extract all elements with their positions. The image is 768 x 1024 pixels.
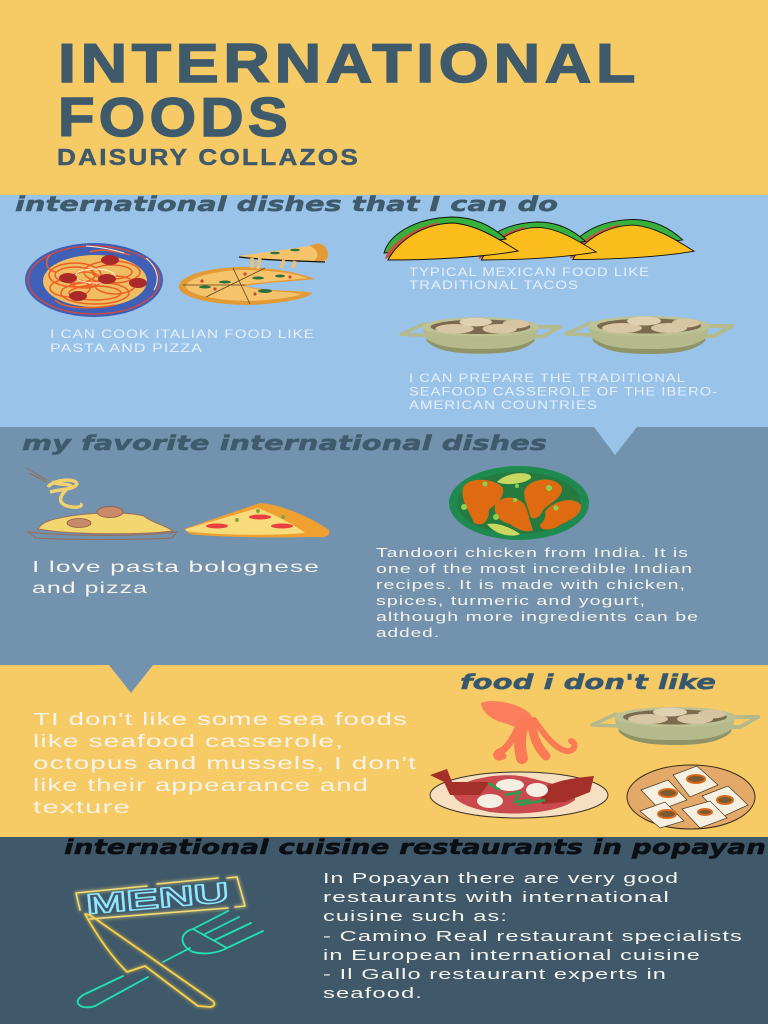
- icon: casseroles: [401, 316, 732, 354]
- text block: seafood casserole: [409, 371, 718, 412]
- text block: seafood casserole: AMERICAN COUNTRIES: [409, 398, 598, 412]
- text block: italian food: PASTA AND PIZZA: [50, 341, 203, 355]
- icon: tandoori chicken plate: [449, 466, 589, 540]
- icon: neon menu with knife and fork: MENU: [85, 877, 230, 920]
- text block: tandoori chicken: although more ingredients can be: [376, 609, 699, 624]
- panel: title header: [0, 0, 768, 195]
- text block: mexican food: TRADITIONAL TACOS: [409, 278, 579, 292]
- icon: casserole: [592, 707, 758, 745]
- icon: fish plate: [430, 769, 608, 818]
- text block: mexican food: [409, 265, 650, 292]
- icon: octopus: [481, 701, 574, 758]
- text block: seafood casserole: I CAN PREPARE THE TRADITIONAL: [409, 371, 686, 385]
- text block: pasta and pizza love: and pizza: [32, 580, 148, 597]
- text block: italian food: I CAN COOK ITALIAN FOOD LIKE: [50, 327, 315, 341]
- arrow: pointer to next panel: [594, 427, 637, 455]
- panel: dishes I can do: [0, 192, 768, 455]
- text block: restaurants in Popayan: - Il Gallo restaurant experts in: [323, 966, 667, 983]
- title: [58, 32, 640, 148]
- text block: tandoori chicken: recipes. It is made with chicken,: [376, 577, 686, 592]
- text block: tandoori chicken: Tandoori chicken from India. It is: [376, 545, 689, 560]
- panel: my favorite dishes: [0, 427, 768, 693]
- heading: international cuisine restaurants: international cuisine restaurants in popayan: [64, 835, 766, 859]
- text block: restaurants in Popayan: cuisine such as:: [323, 908, 508, 925]
- text block: dislikes: octopus and mussels, I don't: [33, 753, 417, 773]
- icon: neon menu with knife and fork: [76, 877, 263, 1007]
- icon: spaghetti plate: [25, 243, 163, 317]
- text block: dislikes: like seafood casserole,: [33, 731, 344, 751]
- text block: restaurants in Popayan: in European international cuisine: [323, 947, 701, 964]
- text block: tandoori chicken: spices, turmeric and yogurt,: [376, 593, 646, 608]
- subtitle: author: DAISURY COLLAZOS: [57, 144, 360, 170]
- text block: mexican food: TYPICAL MEXICAN FOOD LIKE: [409, 265, 650, 279]
- icon: pasta bolognese: [26, 468, 177, 540]
- text block: restaurants in Popayan: - Camino Real restaurant specialists: [323, 928, 743, 945]
- heading: international dishes that I can do: international dishes that I can do: [15, 192, 558, 216]
- text block: dislikes: TI don't like some sea foods: [33, 709, 408, 729]
- text block: restaurants in Popayan: seafood.: [323, 985, 423, 1002]
- heading: my favorite international dishes: my favorite international dishes: [22, 431, 547, 455]
- text block: pasta and pizza love: [32, 559, 320, 597]
- icon: tacos: [384, 217, 694, 260]
- text block: seafood casserole: SEAFOOD CASSEROLE OF THE IBERO-: [409, 384, 718, 398]
- text block: restaurants in Popayan: restaurants with international: [323, 889, 670, 906]
- text block: dislikes: [33, 709, 417, 817]
- title: FOODS: [58, 86, 292, 148]
- text block: tandoori chicken: added.: [376, 625, 440, 640]
- panel: restaurants: [0, 835, 768, 1024]
- text block: restaurants in Popayan: In Popayan there are very good: [323, 870, 679, 887]
- text block: pasta and pizza love: I love pasta bolognese: [32, 559, 320, 576]
- text block: restaurants in Popayan: [323, 870, 743, 1002]
- text block: tandoori chicken: one of the most incredible Indian: [376, 561, 693, 576]
- panel: food I don't like: [0, 665, 768, 837]
- text block: dislikes: like their appearance and: [33, 775, 369, 795]
- text block: dislikes: texture: [33, 797, 131, 817]
- title: INTERNATIONAL: [58, 32, 640, 94]
- text block: tandoori chicken: [376, 545, 699, 640]
- text block: italian food: [50, 327, 315, 355]
- icon: pizza slice: [184, 503, 329, 537]
- heading: food i don't like: food i don't like: [460, 670, 716, 694]
- arrow: pointer to next panel: [109, 665, 153, 693]
- icon: dumpling plate: [627, 765, 755, 829]
- icon: pizza: [179, 244, 328, 305]
